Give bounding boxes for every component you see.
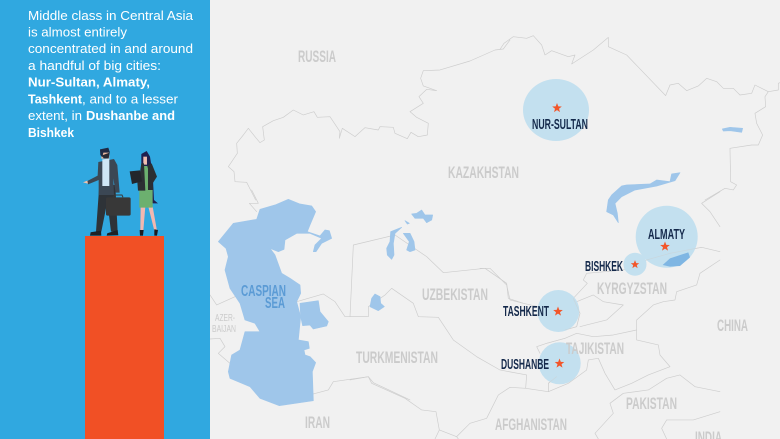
orange pillar	[85, 236, 164, 439]
country labels	[212, 47, 748, 439]
city labels: NUR-SULTAN	[532, 116, 588, 133]
intro text: Bishkek	[28, 125, 75, 140]
caspian sea label: SEA	[265, 295, 285, 312]
country labels: RUSSIA	[298, 47, 336, 66]
intro text: concentrated in and around	[28, 41, 193, 56]
intro text: Dushanbe and	[86, 108, 175, 123]
country labels: UZBEKISTAN	[422, 285, 488, 304]
lake balkhash	[607, 173, 680, 223]
left blue panel	[0, 0, 210, 439]
lake issyk-kul	[663, 252, 690, 267]
country labels: TURKMENISTAN	[356, 348, 438, 367]
map background	[210, 0, 780, 439]
city labels	[501, 116, 685, 373]
city labels: BISHKEK	[585, 258, 623, 275]
illustration: businesswoman	[130, 151, 158, 236]
caspian sea	[218, 199, 332, 406]
city labels: DUSHANBE	[501, 356, 549, 373]
borders over circles	[547, 247, 702, 392]
caspian sea label: CASPIAN	[241, 283, 286, 300]
country labels: KAZAKHSTAN	[448, 163, 519, 182]
country labels: TAJIKISTAN	[566, 339, 624, 358]
country borders south east	[480, 192, 720, 439]
intro text: Middle class in Central Asia	[28, 8, 194, 23]
country labels: AFGHANISTAN	[495, 415, 567, 434]
intro text: , and to a lesser	[82, 92, 179, 106]
intro text: Nur-Sultan, Almaty,	[28, 74, 150, 90]
country labels: BAIJAN	[212, 324, 236, 335]
country labels: PAKISTAN	[626, 394, 677, 413]
city circle: Tashkent	[537, 290, 579, 332]
country labels: AZER-	[215, 313, 235, 324]
intro text: Tashkent	[28, 92, 83, 106]
city labels: TASHKENT	[503, 303, 549, 320]
city circle: Bishkek	[624, 253, 646, 276]
aral sea and lakes	[370, 210, 433, 311]
intro text: extent, in	[28, 108, 82, 123]
intro text: a handful of big cities:	[28, 58, 161, 73]
lake zaysan	[722, 127, 743, 132]
caspian sea label	[241, 283, 286, 312]
country labels: CHINA	[717, 316, 748, 335]
city circle: Almaty	[636, 206, 698, 268]
country borders west	[210, 190, 410, 400]
city star markers	[552, 103, 670, 368]
country borders central	[350, 235, 548, 439]
illustration: businessman	[83, 148, 131, 236]
country borders north	[228, 36, 780, 200]
intro text: is almost entirely	[28, 24, 128, 40]
city labels: ALMATY	[648, 226, 685, 243]
city circle: Nur-Sultan	[523, 79, 589, 141]
intro text	[28, 8, 194, 140]
country labels: IRAN	[305, 413, 330, 432]
city circle: Dushanbe	[539, 342, 581, 384]
country labels: KYRGYZSTAN	[597, 279, 667, 298]
